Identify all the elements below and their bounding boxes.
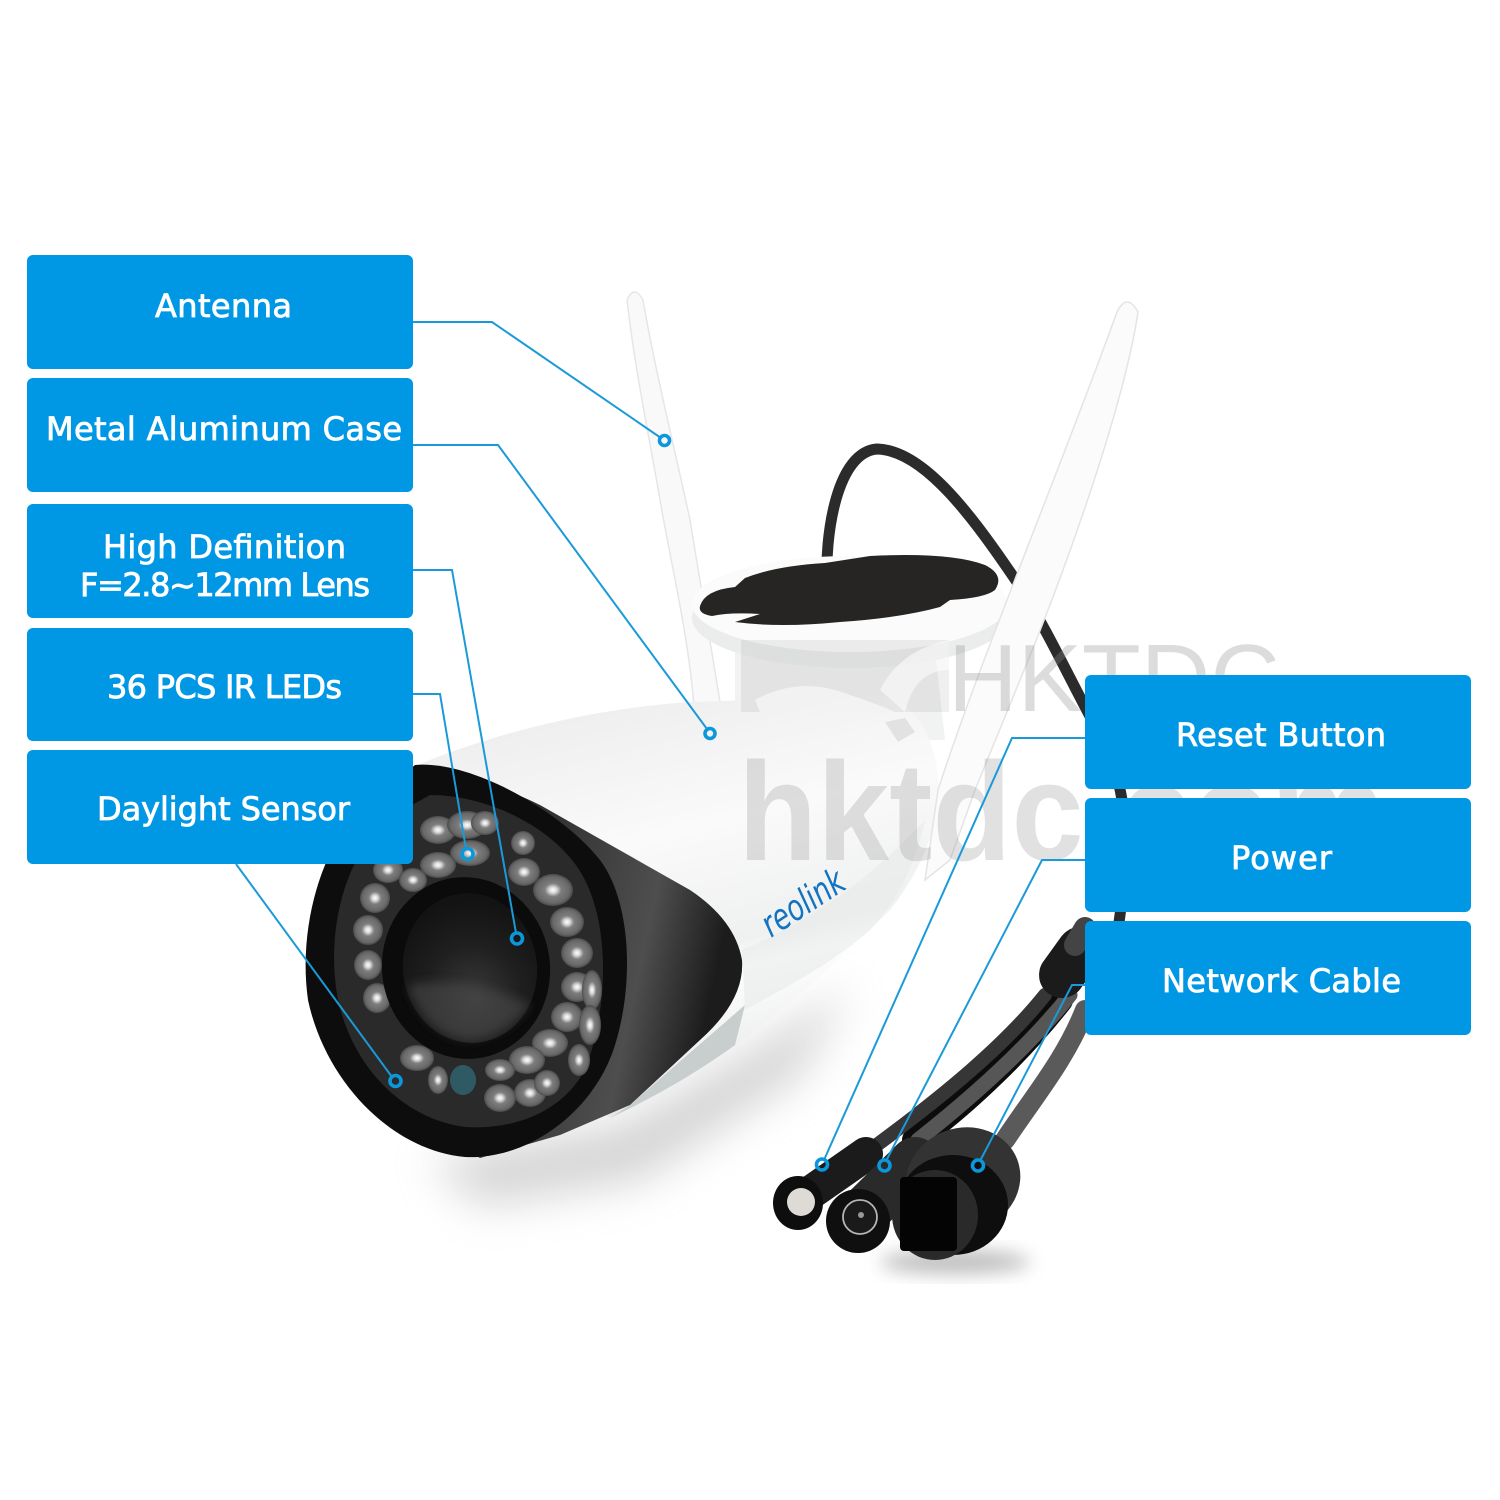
right antenna xyxy=(925,302,1138,880)
lens barrel xyxy=(370,866,562,1070)
line: network cable xyxy=(972,985,1085,1171)
black cable loop xyxy=(827,449,1125,930)
line: reset button xyxy=(816,738,1085,1170)
body bottom edge xyxy=(610,1005,745,1118)
case vent notch xyxy=(885,718,915,742)
connector: reset button xyxy=(773,1154,866,1230)
camera illustration xyxy=(306,292,1138,1260)
label: Power xyxy=(1085,798,1471,912)
line: metal case xyxy=(413,445,715,738)
front rim xyxy=(306,765,627,1157)
ground shadows xyxy=(430,985,1030,1274)
line: lens xyxy=(413,570,522,944)
mount disc xyxy=(692,555,1008,668)
watermark: hktdc xyxy=(738,625,1386,890)
label: High Definition Lens xyxy=(27,504,413,618)
label: 36 PCS IR LEDs: 36 PCS IR LEDs xyxy=(107,668,342,706)
watermark: hktdc: hktdc.com xyxy=(738,733,1386,890)
LED ring xyxy=(353,811,602,1112)
front face xyxy=(334,795,603,1127)
connector: network RJ45 xyxy=(891,1111,1035,1260)
label: Daylight Sensor: Daylight Sensor xyxy=(97,790,351,828)
daylight sensor xyxy=(450,1065,476,1095)
body case xyxy=(410,696,938,1118)
label: High Definition Lens: High Definition xyxy=(103,528,346,566)
reolink logo: reolink xyxy=(754,860,854,946)
label: Network Cable xyxy=(1085,921,1471,1035)
left antenna xyxy=(627,292,723,720)
mount stem xyxy=(735,650,945,740)
label: Reset Button xyxy=(1085,675,1471,789)
label: Metal Aluminum Case: Metal Aluminum Case xyxy=(46,410,402,448)
line: antenna xyxy=(413,322,670,446)
callout lines and markers xyxy=(236,322,1085,1171)
label: Network Cable: Network Cable xyxy=(1162,962,1401,1000)
label: High Definition Lens: F=2.8~12mm Lens xyxy=(80,566,370,604)
label: Reset Button: Reset Button xyxy=(1176,716,1386,754)
lens glass xyxy=(393,884,547,1052)
lens shroud xyxy=(330,774,742,1158)
label: Antenna: Antenna xyxy=(155,287,292,325)
connector: power xyxy=(826,1162,915,1253)
label: Daylight Sensor xyxy=(27,750,413,864)
label: Metal Aluminum Case xyxy=(27,378,413,492)
line: daylight sensor xyxy=(236,864,401,1086)
lens highlight xyxy=(408,982,530,1040)
line: IR LEDs xyxy=(413,694,473,860)
label: 36 PCS IR LEDs xyxy=(27,628,413,741)
line: power xyxy=(879,860,1085,1171)
label: Antenna xyxy=(27,255,413,369)
cable bundle xyxy=(870,928,1085,1150)
label: Power: Power xyxy=(1231,839,1333,877)
watermark: hktdc: HKTDC xyxy=(948,625,1280,732)
case light panel shading xyxy=(742,820,925,1010)
